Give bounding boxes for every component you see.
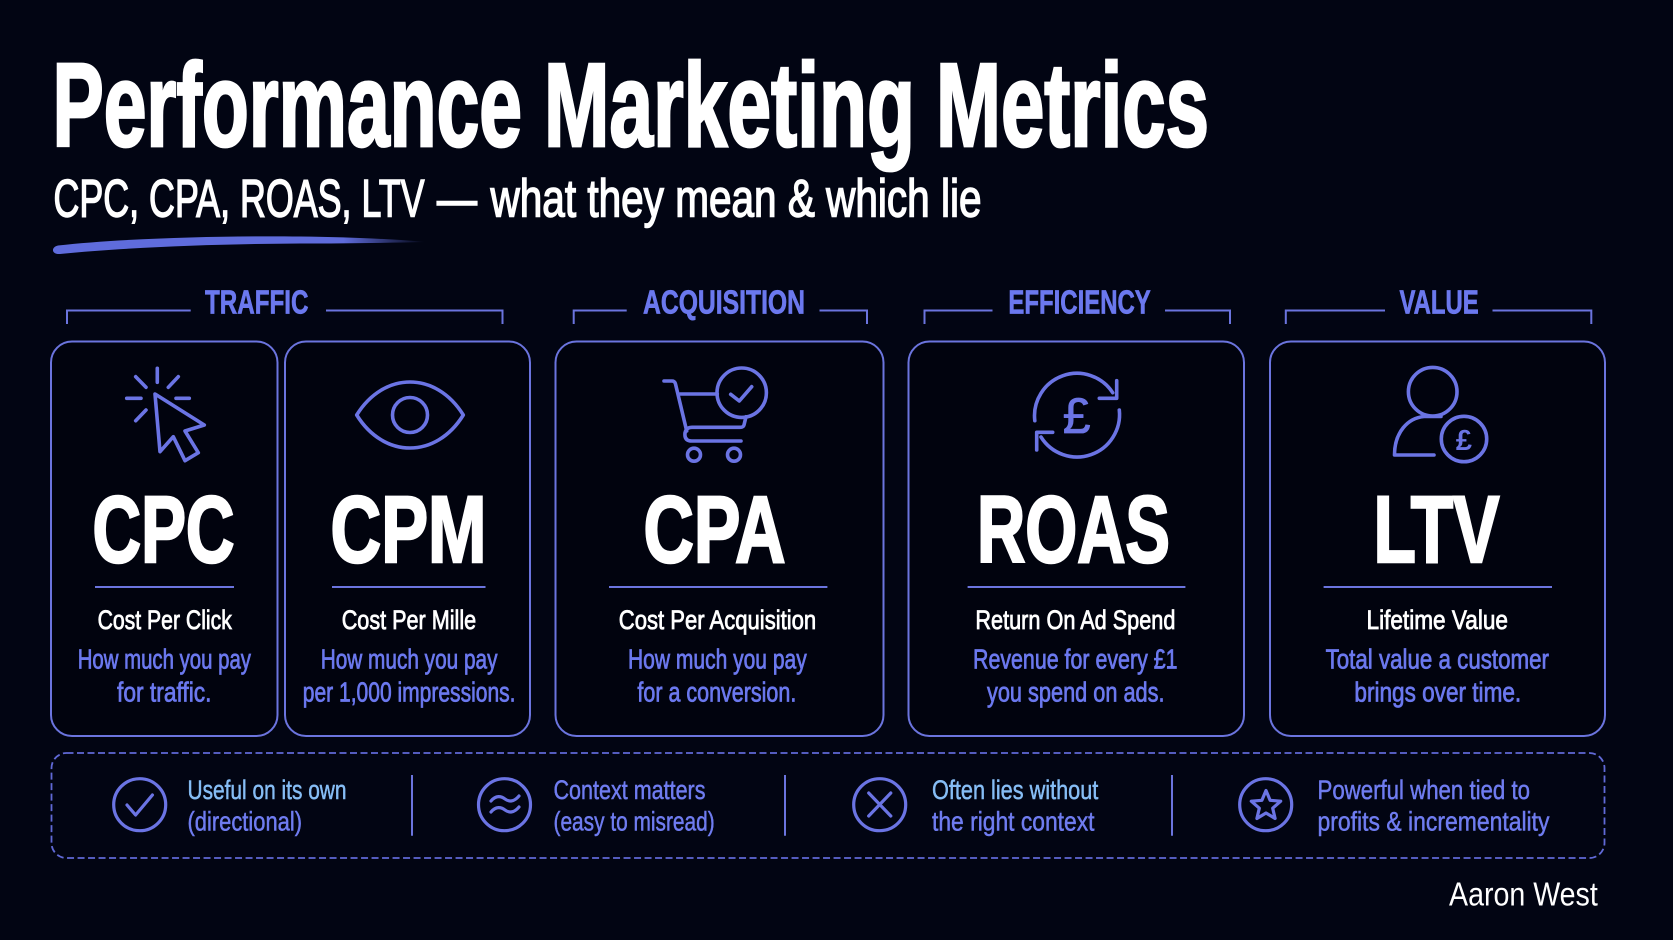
description xyxy=(628,643,807,708)
description: How much you pay xyxy=(321,643,498,674)
icon: customer with pound coin xyxy=(1394,367,1487,462)
legend item: often lies xyxy=(854,775,1099,837)
acronym: ROAS xyxy=(977,477,1170,583)
icon: eye xyxy=(357,382,463,448)
legend item: useful on its own: (directional) xyxy=(188,807,302,837)
icon: pound with circular arrows: £ xyxy=(1063,388,1091,444)
section label: acquisition: ACQUISITION xyxy=(643,284,805,320)
legend item: often lies: the right context xyxy=(932,807,1095,837)
acronym: LTV xyxy=(1374,477,1500,583)
legend item: powerful when tied to profits xyxy=(1240,775,1550,837)
title: Marketing xyxy=(544,39,915,172)
icon: customer with pound coin: £ xyxy=(1456,425,1472,457)
metric name: Lifetime Value xyxy=(1366,605,1508,635)
metric name: Cost Per Mille xyxy=(342,605,476,635)
section label: value: VALUE xyxy=(1400,284,1479,320)
metric name: Return On Ad Spend xyxy=(975,605,1175,635)
title xyxy=(52,39,1209,172)
section label: traffic xyxy=(67,284,502,324)
icon: mouse click cursor xyxy=(127,368,204,461)
panel: CPC card xyxy=(51,342,278,736)
legend item: useful on its own: Useful on its own xyxy=(188,775,346,805)
icon: shopping cart with check xyxy=(664,368,766,461)
legend item: useful on its own xyxy=(114,775,346,837)
title: Performance xyxy=(52,39,522,172)
author credit: Aaron West xyxy=(1449,876,1598,913)
subtitle underline swoosh xyxy=(53,236,428,254)
panel: LTV card xyxy=(1270,342,1605,736)
acronym: CPC xyxy=(92,477,234,583)
description: Revenue for every £1 xyxy=(973,643,1178,674)
legend item: context matters xyxy=(478,775,715,837)
subtitle xyxy=(54,170,982,228)
description: for a conversion. xyxy=(637,677,796,708)
legend item: powerful when tied to profits: Powerful when tied to xyxy=(1318,775,1530,805)
description: How much you pay xyxy=(78,643,251,674)
section label: traffic: TRAFFIC xyxy=(205,284,308,320)
description xyxy=(303,643,516,708)
acronym: CPM xyxy=(330,477,486,583)
subtitle: CPC, CPA, ROAS, LTV xyxy=(54,170,425,228)
metric name: Cost Per Click xyxy=(98,605,232,635)
section label: efficiency xyxy=(924,284,1230,324)
legend item: powerful when tied to profits: profits & incrementality xyxy=(1318,807,1550,837)
icon: pound with circular arrows xyxy=(1035,373,1120,457)
description: Total value a customer xyxy=(1326,643,1549,674)
legend item: context matters: (easy to misread) xyxy=(554,807,715,837)
legend item: often lies: Often lies without xyxy=(932,775,1099,805)
metric name: Cost Per Acquisition xyxy=(619,605,816,635)
panel: ROAS card xyxy=(908,342,1244,736)
description xyxy=(973,643,1178,708)
subtitle: — xyxy=(437,170,477,228)
description: for traffic. xyxy=(117,677,212,708)
panel: CPA card xyxy=(556,342,884,736)
description: you spend on ads. xyxy=(987,677,1164,708)
description: brings over time. xyxy=(1354,677,1521,708)
description: How much you pay xyxy=(628,643,807,674)
panel: CPM card xyxy=(285,342,530,736)
legend panel xyxy=(52,753,1604,858)
description xyxy=(1326,643,1549,708)
subtitle: what they mean & which lie xyxy=(490,170,982,228)
description: per 1,000 impressions. xyxy=(303,677,516,708)
legend item: context matters: Context matters xyxy=(554,775,706,805)
description xyxy=(78,643,251,708)
section label: value xyxy=(1286,284,1591,324)
section label: acquisition xyxy=(574,284,867,324)
title: Metrics xyxy=(936,39,1209,172)
section label: efficiency: EFFICIENCY xyxy=(1008,284,1151,320)
acronym: CPA xyxy=(644,477,786,583)
